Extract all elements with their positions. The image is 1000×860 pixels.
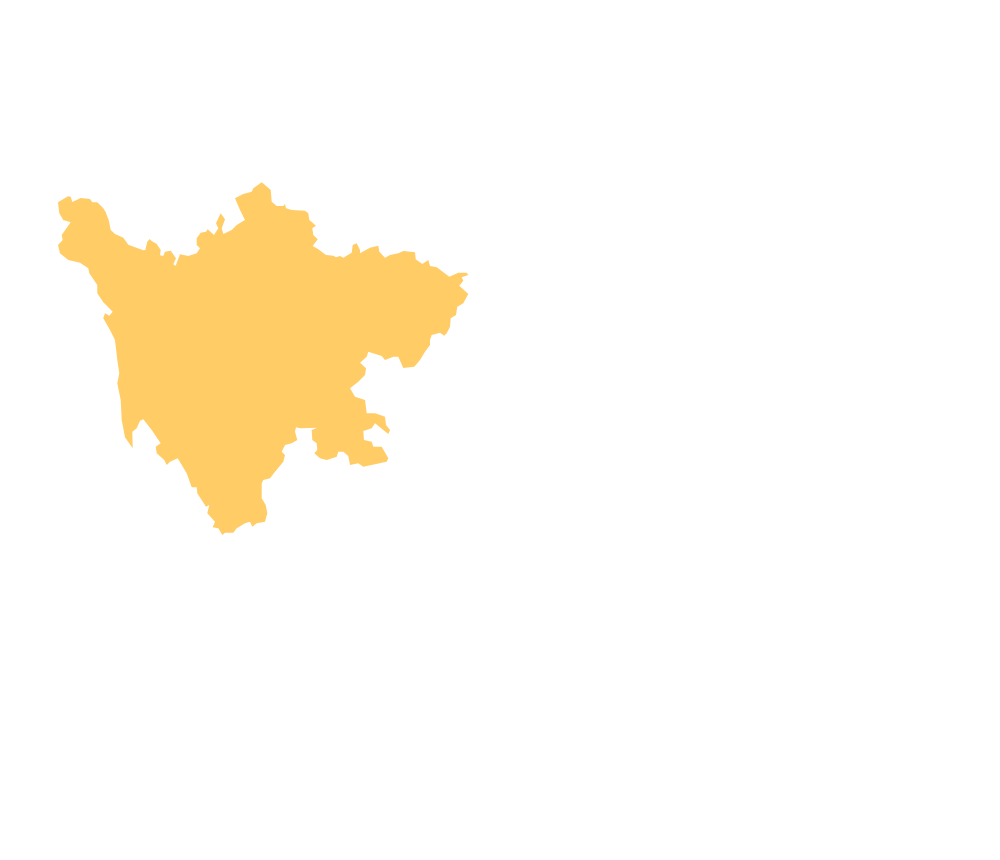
map: region shape	[58, 182, 468, 535]
